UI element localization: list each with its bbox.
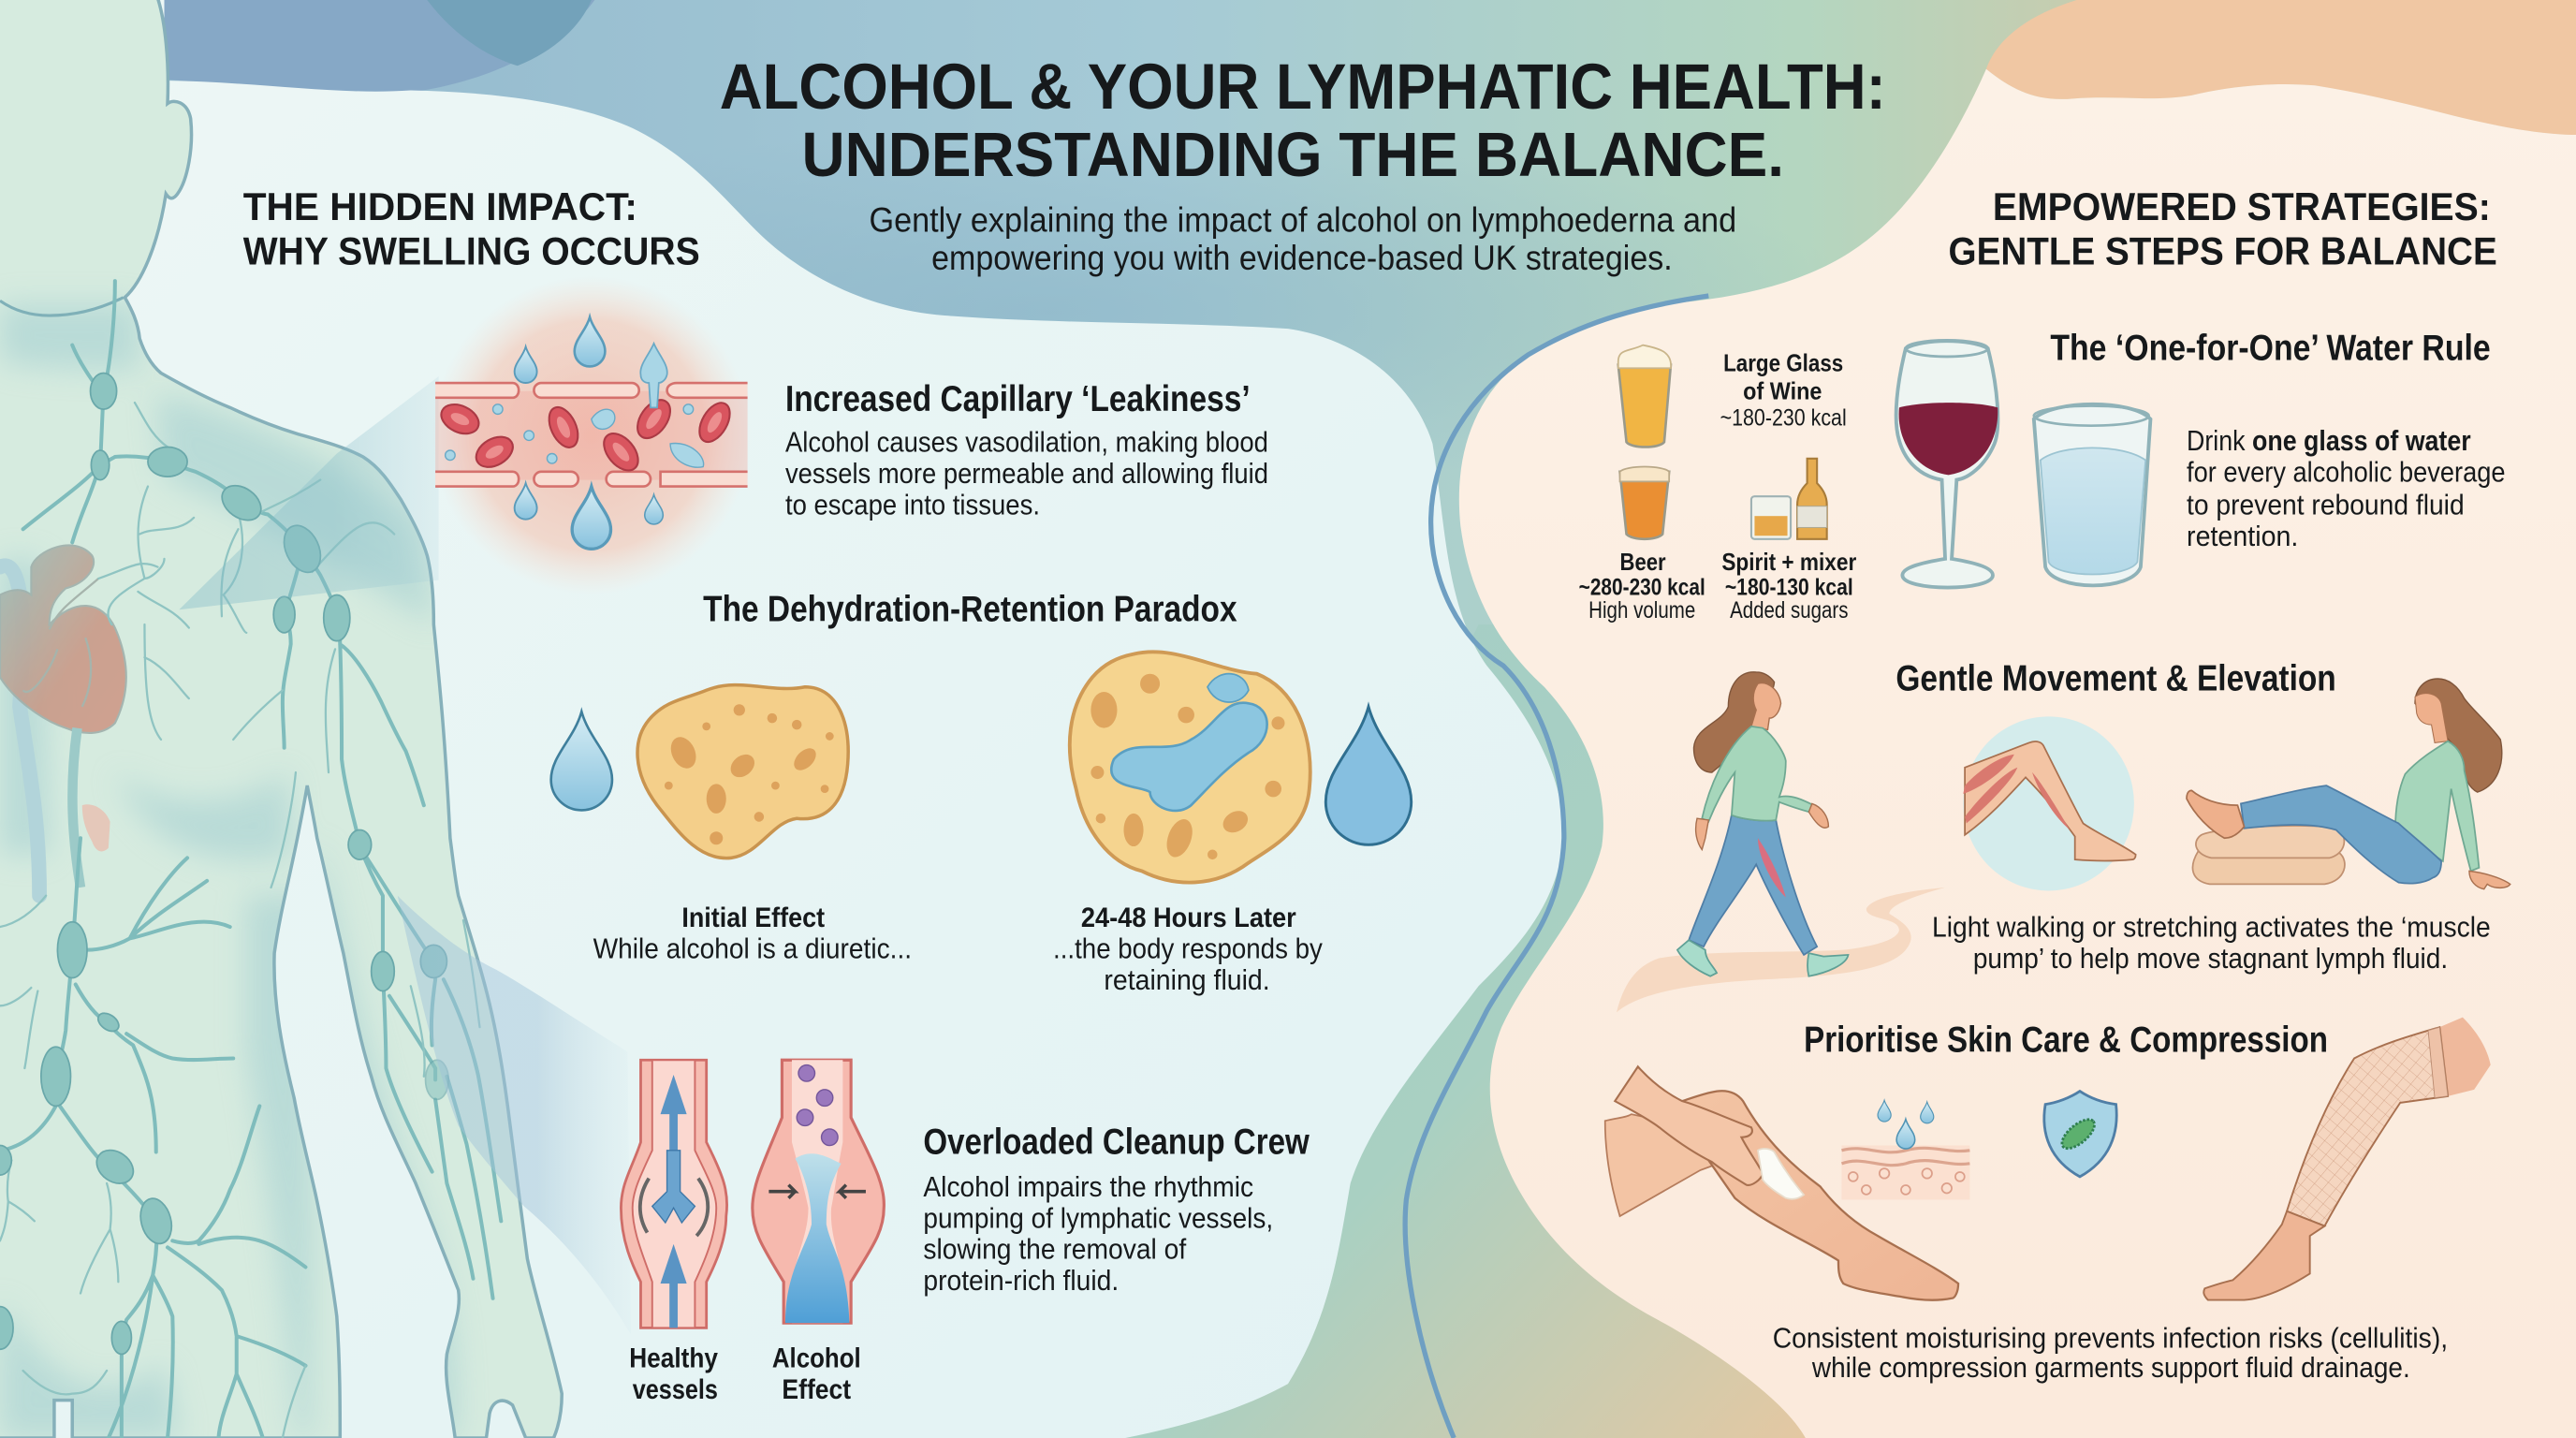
text: spirit calories: Spirit + mixer: [1721, 550, 1856, 576]
icon: tall beer glass: [1618, 345, 1671, 447]
text: spirit calories: Added sugars: [1730, 598, 1848, 624]
stocking band: [2428, 1027, 2448, 1098]
text: beer calories: ~280-230 kcal: [1579, 575, 1705, 600]
icon: swollen sponge with fluid: [1070, 652, 1310, 883]
flow arrows: [661, 1075, 687, 1328]
panel: right cream background: [1459, 69, 2576, 1438]
text: water rule body: Drink one glass of water: [2187, 424, 2471, 457]
moisture drops: [1878, 1100, 1934, 1149]
retained fluid: [1111, 703, 1267, 811]
text: overloaded cleanup crew: [923, 1122, 1310, 1297]
up arrow droplet: [640, 344, 667, 407]
face and neck: [1751, 683, 1781, 729]
text: capillary leakiness: Increased Capillary ‘Leakiness’: [785, 379, 1251, 419]
icon: alcohol-affected vessel: [753, 1060, 884, 1323]
glow: [432, 276, 751, 594]
bacterium: [2057, 1114, 2100, 1153]
torso and arms: [1702, 726, 1814, 822]
cell highlights: [449, 407, 724, 464]
channel: [792, 1060, 842, 1323]
descending vessel: [72, 728, 80, 888]
text: skin care body: while compression garments support fluid drainage.: [1811, 1351, 2410, 1384]
icon: leaky capillary: [432, 276, 751, 594]
text: spirit calories: ~180-130 kcal: [1725, 575, 1853, 600]
body outline: [0, 0, 562, 1438]
wedge: upper callout from body to capillary: [179, 376, 439, 609]
background: lower divider band: [1068, 624, 1808, 1438]
bare thigh: [2439, 1018, 2491, 1096]
icon: wine glass: [1896, 340, 1998, 588]
red blood cells: [436, 394, 736, 477]
text: initial effect: Initial Effect: [681, 902, 825, 933]
text: water rule body: to prevent rebound fluid: [2187, 488, 2465, 521]
text: movement body: pump’ to help move stagnant lymph fluid.: [1973, 942, 2448, 975]
text: overloaded cleanup crew: Overloaded Cleanup Crew: [923, 1122, 1310, 1162]
hair: [2415, 679, 2502, 792]
labels: vessel types: Healthy: [629, 1343, 718, 1374]
hair: [1694, 672, 1775, 772]
inner channel: [633, 1060, 716, 1328]
blob: top-left blue: [165, 0, 594, 95]
heading: empowered strategies: [1949, 184, 2497, 273]
sponge pores: [1090, 674, 1284, 860]
foot: [2203, 1211, 2324, 1300]
torso and arm: [2395, 741, 2479, 871]
arm and hand: [1615, 1066, 1763, 1185]
cream: [1758, 1149, 1804, 1199]
subtitle: Gently explaining the impact of alcohol on lymphoederna and: [869, 201, 1736, 240]
text: wine calories: ~180-230 kcal: [1720, 406, 1847, 432]
text: wine calories: Large Glass: [1723, 351, 1843, 377]
text: overloaded cleanup crew: slowing the removal of: [923, 1233, 1187, 1266]
icon: water drop small: [551, 712, 612, 810]
text: skin care body: [1773, 1321, 2448, 1384]
icon: whisky tumbler: [1751, 496, 1791, 539]
lymph nodes: [0, 373, 448, 1354]
skin pores: [1849, 1168, 1965, 1195]
pale central veins: [0, 565, 39, 896]
text: movement body: Light walking or stretching activates the ‘muscle: [1932, 911, 2491, 944]
protein particles: [797, 1065, 838, 1146]
head chin line: [0, 298, 124, 315]
thigh: [1605, 1114, 1719, 1216]
blob: top-right peach: [1986, 0, 2576, 135]
vessel interior: [435, 391, 748, 480]
text: capillary leakiness: to escape into tissues.: [785, 488, 1040, 521]
heading: hidden impact: WHY SWELLING OCCURS: [243, 229, 700, 273]
stocking: [2287, 1027, 2448, 1226]
hand: [2469, 871, 2510, 889]
subtitle: empowering you with evidence-based UK strategies.: [931, 239, 1673, 277]
liver mark: [82, 804, 110, 851]
icon: dry sponge: [637, 685, 848, 858]
icon: skin layers with drops: [1841, 1100, 1969, 1199]
leg: [1682, 1091, 1958, 1300]
text: capillary leakiness: vessels more permeable and allowing fluid: [785, 457, 1268, 490]
text: beer calories: High volume: [1588, 598, 1695, 624]
droplets around vessel: [515, 317, 663, 549]
heading: empowered strategies: GENTLE STEPS FOR BALANCE: [1949, 229, 2497, 273]
sponge holes: [665, 704, 834, 844]
text: wine calories: [1720, 351, 1847, 432]
shoes: [1677, 940, 1848, 976]
text: beer calories: Beer: [1620, 550, 1666, 576]
title: UNDERSTANDING THE BALANCE.: [801, 121, 1784, 190]
blocked fluid: [785, 1153, 849, 1323]
text: water rule body: [2187, 424, 2506, 552]
icon: pint glass: [1620, 467, 1669, 539]
vessel walls: [435, 383, 748, 487]
heart: [0, 545, 126, 733]
text: initial effect: [593, 902, 912, 964]
illustration: seated woman with elevated legs: [2187, 679, 2510, 889]
text: initial effect: While alcohol is a diuretic...: [593, 932, 912, 964]
rotation arrows: [640, 1179, 708, 1236]
fine lymph branches: [0, 403, 479, 1438]
text: movement body: [1932, 911, 2491, 975]
labels: vessel types: vessels: [633, 1374, 718, 1405]
heading: dehydration paradox: The Dehydration-Retention Paradox: [703, 590, 1237, 630]
background: header band shading: [230, 131, 1873, 493]
text: beer calories: [1579, 550, 1705, 624]
illustration: leg with moisturiser: [1605, 1066, 1958, 1300]
labels: vessel types: Alcohol: [772, 1343, 861, 1374]
panel: left light background: [0, 0, 1564, 1438]
heading: hidden impact: THE HIDDEN IMPACT:: [243, 184, 637, 228]
text: later effect: [1053, 902, 1323, 996]
decoration: walking path: [1617, 888, 1945, 1012]
subtitle: [869, 201, 1736, 277]
heading: gentle movement: Gentle Movement & Elevation: [1895, 658, 2336, 698]
text: overloaded cleanup crew: pumping of lymphatic vessels,: [923, 1201, 1273, 1234]
title: ALCOHOL & YOUR LYMPHATIC HEALTH:: [720, 51, 1886, 123]
body shading: [0, 304, 457, 1438]
icon: healthy vessel: [621, 1060, 727, 1328]
icon: glass of water: [2034, 404, 2150, 585]
illustration: compression stocking leg: [2203, 1018, 2491, 1300]
muscle highlight: [1758, 838, 1786, 897]
wine: [1899, 403, 1998, 475]
legs: [1689, 815, 1817, 955]
divider line: blue curve: [1405, 296, 1708, 1438]
heading: water rule: The ‘One-for-One’ Water Rule: [2050, 328, 2491, 368]
title: [720, 51, 1886, 190]
wedge: lower callout from body to vessels: [398, 896, 631, 1334]
text: overloaded cleanup crew: Alcohol impairs the rhythmic: [923, 1170, 1253, 1203]
heading: empowered strategies: EMPOWERED STRATEGIES:: [1993, 184, 2491, 228]
icon: water drop large: [1325, 707, 1412, 844]
icon: protective shield: [2044, 1092, 2116, 1177]
heading: skin care: Prioritise Skin Care & Compression: [1804, 1020, 2328, 1060]
labels: vessel types: Effect: [782, 1374, 851, 1405]
hands: [1696, 803, 1828, 850]
text: capillary leakiness: [785, 379, 1268, 521]
main lymph vessels: [0, 281, 501, 1438]
text: later effect: ...the body responds by: [1053, 932, 1323, 964]
fluid bubbles: [1208, 674, 1249, 702]
icon: calf muscle circle: [1963, 716, 2136, 890]
pillows: [2192, 851, 2345, 884]
heading: hidden impact: [243, 184, 700, 273]
blob: top circle: [427, 0, 592, 66]
text: wine calories: of Wine: [1743, 379, 1822, 405]
face and neck: [2415, 694, 2448, 742]
text: skin care body: Consistent moisturising prevents infection risks (cellulitis),: [1773, 1321, 2448, 1354]
text: later effect: retaining fluid.: [1104, 963, 1270, 996]
trousers: [2241, 785, 2441, 884]
muscles: [1963, 755, 2070, 829]
text: capillary leakiness: Alcohol causes vasodilation, making blood: [785, 426, 1268, 459]
valve: [652, 1151, 695, 1223]
small plasma drops: [446, 404, 704, 467]
text: overloaded cleanup crew: protein-rich fluid.: [923, 1264, 1119, 1297]
leg: [1965, 741, 2136, 860]
text: water rule body: retention.: [2187, 520, 2298, 552]
text: later effect: 24-48 Hours Later: [1081, 902, 1296, 933]
text: spirit calories: [1721, 550, 1856, 624]
feet: [2187, 790, 2244, 838]
text: water rule body: for every alcoholic beverage: [2187, 455, 2506, 488]
labels: vessel types: [629, 1343, 861, 1405]
illustration: translucent human body with lymphatic system: [0, 0, 585, 1438]
body fill: [0, 0, 585, 1438]
heart vessels: [23, 579, 98, 707]
illustration: walking woman: [1677, 672, 1848, 976]
compression arrows: [768, 1185, 866, 1198]
icon: spirit bottle: [1797, 459, 1827, 539]
